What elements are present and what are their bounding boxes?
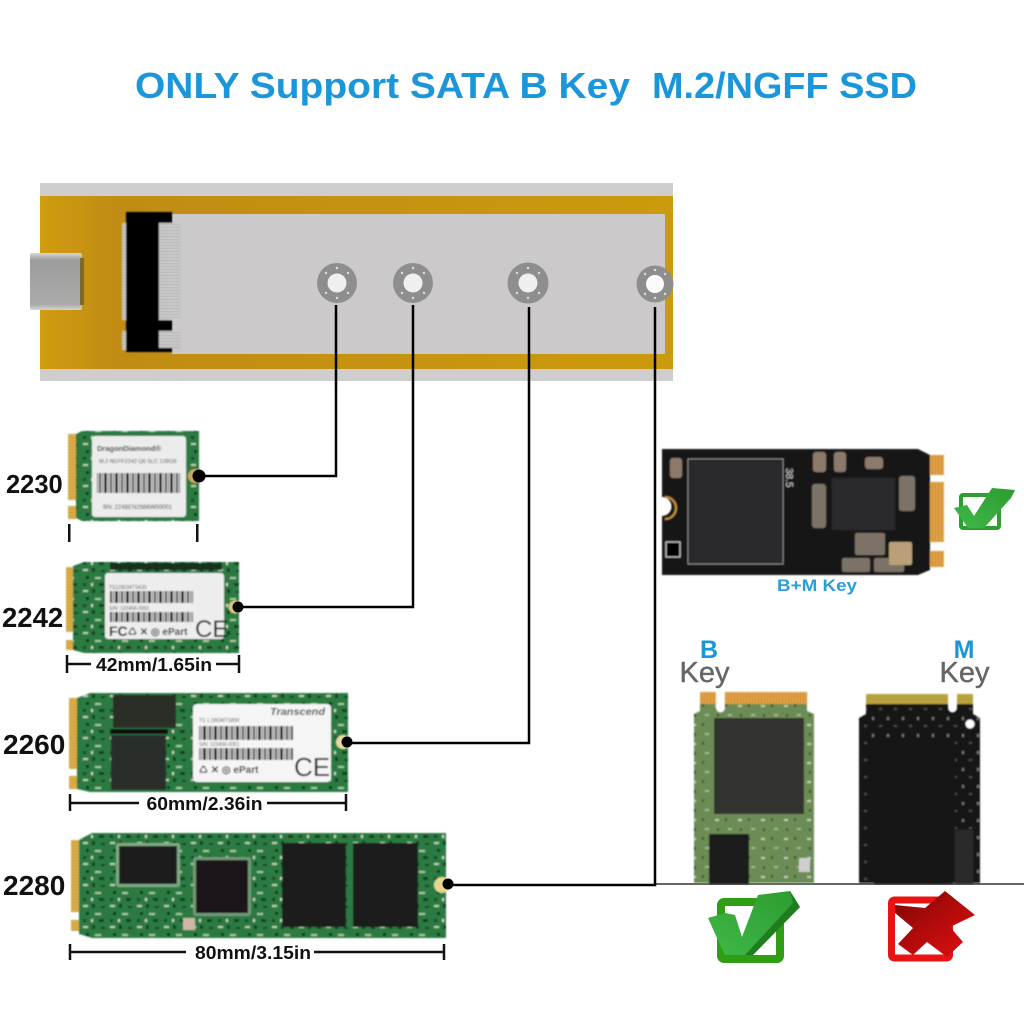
panel: M.2 enclosure xyxy=(30,183,674,381)
SSD 2242 board: FC xyxy=(109,623,128,639)
SSD 2242 board xyxy=(66,562,242,653)
mounting hole: 2280 xyxy=(636,266,674,302)
SSD 2260 board: TS 1.28GMTS800 xyxy=(199,718,240,724)
B key label: B xyxy=(700,636,718,664)
SSD 2242 board: S/N: 123456-0001 xyxy=(109,606,150,612)
SSD 2230 board: DragonDiamond® xyxy=(97,444,161,453)
icon: large red cross xyxy=(892,891,975,958)
B key label xyxy=(680,636,730,689)
dimension: 42mm/1.65in: 42mm/1.65in xyxy=(96,655,212,675)
dimension ticks: 2230 xyxy=(68,524,198,542)
B key label: Key xyxy=(680,657,730,689)
mounting hole: 2260 xyxy=(508,262,548,304)
M key label: Key xyxy=(940,657,990,689)
SSD 2280 board xyxy=(71,833,450,938)
SSD 2260 board: Transcend xyxy=(270,707,326,718)
M key label xyxy=(940,636,990,689)
title xyxy=(135,65,917,106)
B key SSD board xyxy=(694,692,814,884)
M key SSD board xyxy=(859,694,980,884)
B+M Key caption: B+M Key xyxy=(777,576,858,595)
SSD 2230 board: BN: 2248EN2566W00001 xyxy=(103,505,173,511)
connector line: 2242 xyxy=(232,305,413,612)
icon: large check mark xyxy=(708,891,800,959)
size label: 2230: 2230 xyxy=(6,471,63,499)
size label: 2242: 2242 xyxy=(2,602,63,633)
SSD 2242 board: CE xyxy=(195,616,228,643)
horizontal baseline xyxy=(655,883,1024,885)
B+M key SSD board xyxy=(662,449,944,575)
dimension: 80mm/3.15in: 80mm/3.15in xyxy=(195,943,311,963)
mounting hole: 2242 xyxy=(393,263,433,303)
title: ONLY Support SATA B Key xyxy=(135,65,630,106)
SSD 2242 board: ♺ ✕ ◎ ePart xyxy=(128,627,188,638)
title: M.2/NGFF SSD xyxy=(652,65,917,106)
icon: small check mark xyxy=(954,488,1015,528)
connector line: 2280 xyxy=(442,307,655,890)
dimension: 60mm/2.36in: 60mm/2.36in xyxy=(146,794,262,814)
SSD 2230 board: M.2 NGFF2242 Q6 SLC 128GB xyxy=(99,459,177,465)
dimension: 42mm/1.65in xyxy=(67,655,239,675)
SSD 2260 board: CE xyxy=(294,752,330,782)
mounting hole: 2230 xyxy=(317,263,357,303)
B+M key SSD board: 38.5 xyxy=(783,468,794,488)
connector line: 2260 xyxy=(342,307,529,748)
SSD 2242 board: TS128GMTS430 xyxy=(109,585,147,591)
SSD 2260 board: S/N: 123456-0001 xyxy=(199,742,240,748)
size label: 2260: 2260 xyxy=(3,729,65,760)
SSD 2230 board xyxy=(68,431,202,521)
M.2 connector slot xyxy=(122,212,181,352)
dimension: 80mm/3.15in xyxy=(70,943,444,963)
M key label: M xyxy=(954,636,974,664)
icon: USB-C plug xyxy=(30,253,84,310)
SSD 2260 board: ♺ ✕ ◎ ePart xyxy=(199,765,259,776)
size label: 2280: 2280 xyxy=(3,870,65,901)
SSD 2260 board xyxy=(69,693,350,792)
dimension: 60mm/2.36in xyxy=(70,794,346,814)
connector line: 2230 xyxy=(192,305,336,482)
